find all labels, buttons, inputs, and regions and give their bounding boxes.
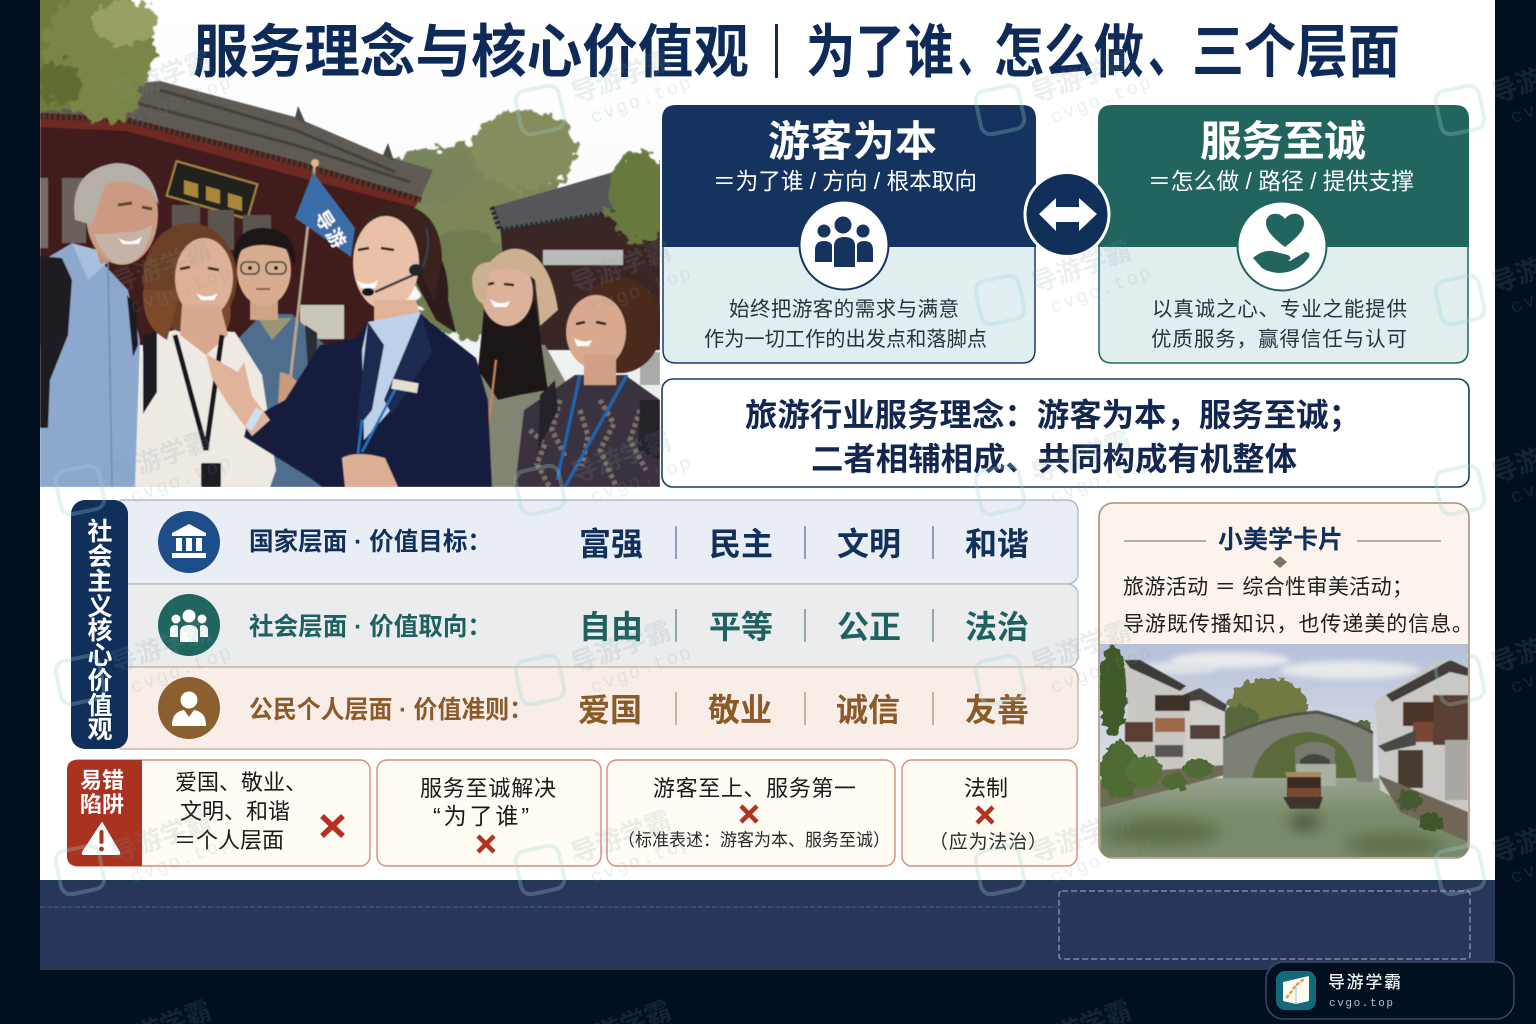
watermark layer: 导游学霸 [107,235,215,299]
card heading [1124,526,1441,568]
watermark layer: cvgo.top [1048,641,1156,699]
panel: 游客为本 [662,105,1036,363]
icon: heart in hand [1238,202,1326,290]
man in blue shirt [40,163,159,487]
woman in white blouse [127,223,276,487]
title: 、 [1148,20,1190,85]
watermark layer: 导游学霸 [1027,45,1135,109]
watermark layer: 导游学霸 [107,615,215,679]
panel: 游客为本: 作为一切工作的出发点和落脚点 [704,328,987,351]
callout: service concept summary [662,379,1469,487]
man with glasses [232,228,328,487]
watermark layer: 导游学霸 [1027,615,1135,679]
panel: 服务至诚 [1098,105,1469,363]
subheading: ＝怎么做 / 路径 / 提供支撑 [1148,168,1414,194]
watermark layer: 导游学霸 [567,425,675,489]
vertical heading: 价 [87,667,113,695]
row: citizen level: 敬业 [708,692,772,728]
watermark layer: 导游学霸 [1027,805,1135,869]
watermark layer: 导游学霸 [567,805,675,869]
watermark layer: cvgo.top [588,261,696,319]
vertical heading: 值 [87,692,113,720]
title: 怎么做 [994,20,1144,85]
flag and pole: 导游 [310,206,352,254]
woman with short hair [515,277,662,487]
vertical heading: 观 [87,716,113,744]
icon: map [1276,971,1316,1010]
label: 易错陷阱: 易错 [80,768,124,793]
watermark layer: cvgo.top [128,261,236,319]
heading: 服务至诚: 服务至诚 [1200,118,1366,165]
vertical heading [71,500,128,749]
row: social level: 自由 [579,609,643,645]
watermark layer: cvgo.top [1048,831,1156,889]
panel: core socialist values [71,500,1078,749]
mistake: slogan: 游客至上、服务第一 [653,776,856,801]
tree right [608,152,672,244]
panel: aesthetics card [1099,503,1473,860]
watermark layer: cvgo.top [588,831,696,889]
row: citizen level: 诚信 [836,692,900,728]
watermark layer: 导游学霸 [1027,235,1135,299]
row: social level: 法治 [965,609,1029,645]
watermark layer: cvgo.top [588,451,696,509]
watermark layer: cvgo.top [128,451,236,509]
card heading: 小美学卡片 [1218,526,1343,554]
watermark layer: cvgo.top [588,641,696,699]
logo badge: cvgo.top [1329,998,1393,1010]
icon: government building [158,511,220,573]
description: 始终把游客的需求与满意 [729,298,959,321]
watermark layer: 导游学霸 [107,45,215,109]
vertical heading: 心 [87,642,113,670]
row: national level: 富强 [579,526,643,562]
mistake: personal level [67,760,370,866]
watermark layer: 导游学霸 [1027,425,1135,489]
row: national level: 和谐 [965,526,1029,562]
row: national level: 民主 [709,526,773,562]
subheading: ＝为了谁 / 方向 / 根本取向 [713,168,977,194]
mistake: personal level: 爱国、敬业、 [175,770,307,795]
label: 易错陷阱: 陷阱 [80,792,124,817]
vertical heading: 核 [87,617,113,645]
row: citizen level [120,667,1078,749]
row: social level [120,584,1078,667]
title [193,20,1400,85]
title: 三个层面 [1192,20,1400,85]
tree top left [20,0,157,122]
row: citizen level: 爱国 [578,692,642,728]
row: citizen level: 公民个人层面 · 价值准则： [249,696,533,724]
guide [206,204,492,487]
panel: common mistakes [67,760,1077,866]
mistake: who it serves: 服务至诚解决 [420,776,556,801]
row: national level: 国家层面 · 价值目标： [249,528,492,556]
description: 以真诚之心、专业之能提供 [1152,298,1407,321]
row: social level: 平等 [709,609,773,645]
mistake: slogan: （标准表述：游客为本、服务至诚） [618,830,890,850]
arrow: two-way between concepts [1025,172,1109,256]
title: 、 [958,20,994,85]
label: 易错陷阱 [67,760,142,866]
callout: service concept summary: 旅游行业服务理念：游客为本，服务至诚； [745,397,1361,433]
vertical heading: 社 [87,518,113,546]
icon: person [158,677,220,739]
watermark layer: cvgo.top [128,831,236,889]
mistake: slogan [607,760,895,866]
vertical heading: 主 [87,568,113,596]
watermark layer: cvgo.top [588,71,696,129]
watermark layer: 导游学霸 [107,425,215,489]
watermark layer: cvgo.top [1048,71,1156,129]
watermark layer: 导游学霸 [567,45,675,109]
logo badge: 导游学霸 [1328,972,1401,992]
mistake: who it serves: “为了谁” [433,803,529,829]
logo badge [1266,962,1514,1019]
row: social level: 公正 [837,609,901,645]
watermark layer: 导游学霸 [567,615,675,679]
watermark layer: cvgo.top [128,71,236,129]
mistake: rule of law [902,760,1077,866]
watermark layer: cvgo.top [128,641,236,699]
woman in hat [470,249,570,487]
watermark layer: cvgo.top [1048,261,1156,319]
icon: warning [82,822,120,855]
panel: 服务至诚: 优质服务，赢得信任与认可 [1151,328,1407,351]
row: social level: 社会层面 · 价值取向： [249,613,492,641]
icon: people [158,594,220,656]
vertical heading: 义 [87,593,113,621]
watermark layer: 导游学霸 [107,805,215,869]
flag and pole [278,159,355,426]
icon: group of people [800,200,888,290]
card text: 旅游活动 ＝ 综合性审美活动； [1123,576,1413,599]
row: national level [120,500,1078,584]
mistake: who it serves [377,760,601,866]
watermark layer: 导游学霸 [567,235,675,299]
row: citizen level: 友善 [965,692,1029,728]
mistake: rule of law: （应为法治） [929,831,1047,853]
heading: 游客为本: 游客为本 [768,118,937,165]
hero photo: guide with tourists at a temple [20,0,672,487]
title: 为了谁 [806,20,954,85]
navy footer band [40,880,1495,970]
mistake: personal level: 文明、和谐 [180,799,290,824]
mistake: rule of law: 法制 [964,776,1008,801]
mistake: personal level: ＝个人层面 [174,828,284,853]
vertical heading: 会 [87,543,113,571]
callout: service concept summary: 二者相辅相成、共同构成有机整体 [811,441,1297,477]
title: 服务理念与核心价值观 [193,20,749,85]
image: water town with stone bridge [1099,644,1468,860]
watermark layer: cvgo.top [1048,451,1156,509]
panel: aesthetics card: 导游既传播知识，也传递美的信息。 [1123,613,1473,636]
row: national level: 文明 [837,526,901,562]
